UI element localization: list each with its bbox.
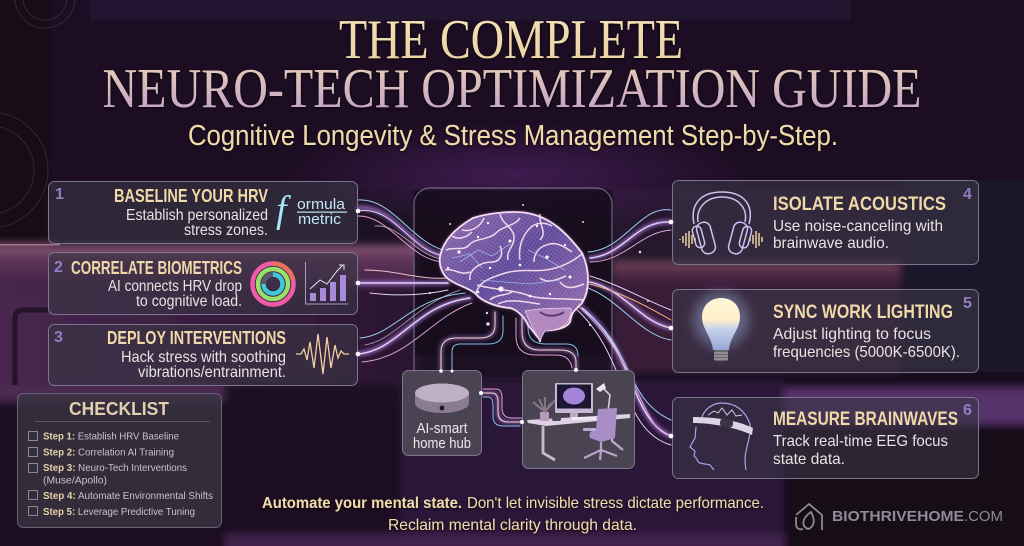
panel 5: sync work lighting: frequencies (5000K-6500K).: [773, 344, 960, 361]
panel: checklist: Step 5: Leverage Predictive Tuning: [43, 506, 195, 518]
icon: head with EEG band: [690, 403, 753, 470]
icon: desk, monitor, lamp, chair: [527, 383, 630, 460]
icon: sound wave: [296, 334, 349, 374]
panel 6: measure brainwaves: Track real-time EEG focus: [773, 433, 948, 450]
panel 4: isolate acoustics: Use noise-canceling with: [773, 218, 943, 235]
panel 3: deploy interventions: [48, 324, 358, 386]
closing statement: Reclaim mental clarity through data.: [388, 517, 637, 534]
panel 6: measure brainwaves: [672, 398, 978, 478]
panel 2: correlate biometrics: to cognitive load.: [136, 293, 242, 310]
panel: smart desk: [522, 370, 634, 468]
icon: hub puck: [415, 384, 469, 413]
panel 2: correlate biometrics: AI connects HRV drop: [108, 278, 242, 295]
logo: BioThriveHome.com: .COM: [964, 508, 1003, 525]
panel 4: isolate acoustics: 4: [963, 186, 972, 203]
closing statement: Don't let invisible stress dictate performance.: [467, 495, 764, 512]
panel 3: deploy interventions: DEPLOY INTERVENTIONS: [107, 327, 286, 348]
icon: formula metric: ormula: [297, 196, 346, 213]
panel 2: correlate biometrics: 2: [54, 259, 63, 276]
icon: light bulb: [693, 292, 749, 364]
icon: formula metric: f: [276, 189, 291, 231]
panel 6: measure brainwaves: state data.: [773, 451, 845, 468]
icon: activity rings: [252, 264, 294, 304]
central brain panel: [414, 188, 612, 372]
icon: formula metric: [276, 189, 347, 231]
flowing data streams: [358, 200, 671, 445]
subtitle: Cognitive Longevity & Stress Management Step-by-Step.: [188, 120, 838, 152]
panel: AI-smart home hub: AI-smart: [416, 421, 468, 437]
panel 5: sync work lighting: [672, 290, 978, 372]
panel 3: deploy interventions: Hack stress with soothing: [121, 349, 286, 366]
panel 6: measure brainwaves: MEASURE BRAINWAVES: [773, 408, 958, 430]
panel: checklist: Step 3: Neuro-Tech Interventions: [43, 462, 187, 474]
panel 3: deploy interventions: vibrations/entrainment.: [138, 364, 286, 381]
panel: checklist: Step 1: Establish HRV Baseline: [43, 430, 179, 442]
panel 2: correlate biometrics: CORRELATE BIOMETRICS: [71, 257, 242, 278]
logo: BioThriveHome.com: BIOTHRIVEHOME: [832, 508, 964, 525]
icon: growth chart: [306, 262, 348, 304]
panel: checklist: (Muse/Apollo): [43, 474, 107, 486]
faucet silhouette: [15, 310, 48, 385]
panel: checklist: [18, 394, 222, 528]
panel 4: isolate acoustics: [672, 180, 978, 264]
panel: AI-smart home hub: home hub: [413, 436, 471, 452]
panel: checklist: Step 2: Correlation AI Training: [43, 446, 174, 458]
panel 1: baseline your HRV: Establish personalized: [126, 207, 268, 224]
panel 5: sync work lighting: Adjust lighting to focus: [773, 326, 931, 343]
title: [102, 9, 922, 120]
panel: AI-smart home hub: [402, 370, 482, 456]
floating sparkles: [429, 204, 649, 342]
panel 4: isolate acoustics: brainwave audio.: [773, 235, 889, 252]
panel 1: baseline your HRV: [48, 182, 358, 244]
title: THE COMPLETE: [339, 9, 683, 71]
panel 1: baseline your HRV: stress zones.: [184, 222, 268, 239]
panel 6: measure brainwaves: 6: [963, 402, 972, 419]
panel 1: baseline your HRV: 1: [55, 186, 64, 203]
panel 1: baseline your HRV: BASELINE YOUR HRV: [114, 185, 269, 206]
brain illustration: [440, 212, 588, 340]
panel 2: correlate biometrics: [48, 252, 358, 314]
panel 4: isolate acoustics: ISOLATE ACOUSTICS: [773, 193, 946, 215]
closing statement: Automate your mental state.: [262, 495, 462, 512]
panel 3: deploy interventions: 3: [54, 329, 63, 346]
hub and desk connector dots: [439, 368, 578, 424]
closing statement: [262, 495, 764, 534]
panel: checklist: CHECKLIST: [69, 398, 170, 419]
panel 5: sync work lighting: SYNC WORK LIGHTING: [773, 301, 953, 323]
panel: checklist: Step 4: Automate Environmental Shifts: [43, 490, 213, 502]
logo: BioThriveHome.com: [796, 504, 1003, 530]
panel 5: sync work lighting: 5: [963, 295, 972, 312]
connector dots: [356, 209, 673, 438]
icon: formula metric: metric: [298, 211, 342, 228]
icon: headphones: [680, 192, 762, 255]
